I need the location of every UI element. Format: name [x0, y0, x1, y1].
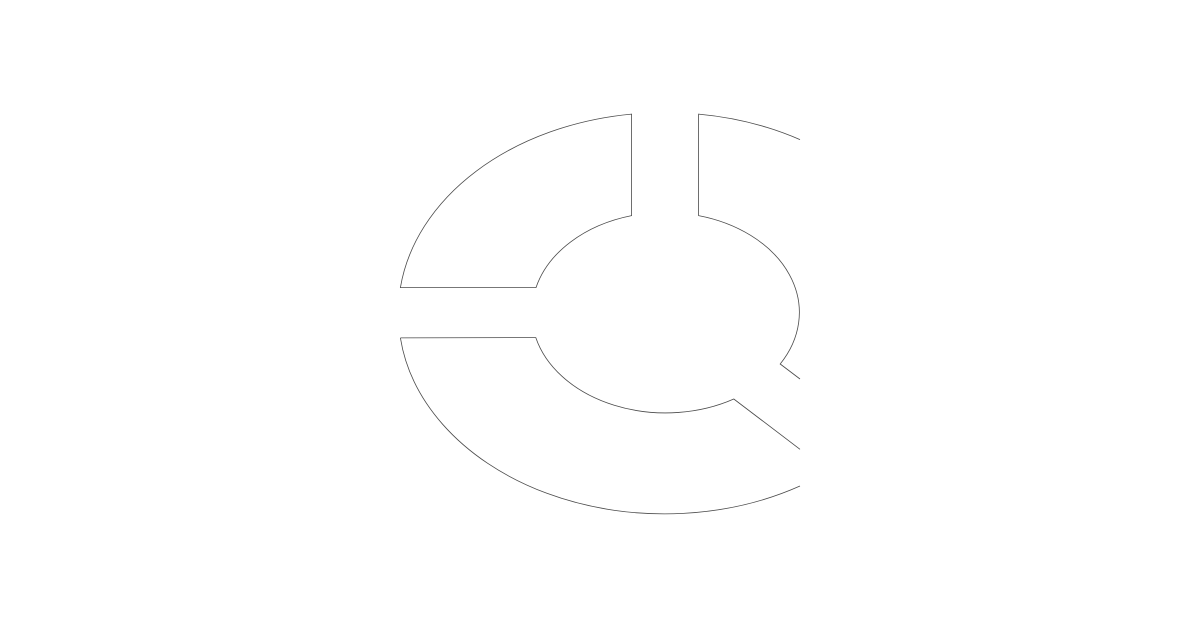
segment: upper-right, cut off at right edge	[699, 114, 800, 379]
segment: bottom, cut off at right edge	[400, 338, 800, 514]
segment: upper-left	[400, 114, 632, 288]
